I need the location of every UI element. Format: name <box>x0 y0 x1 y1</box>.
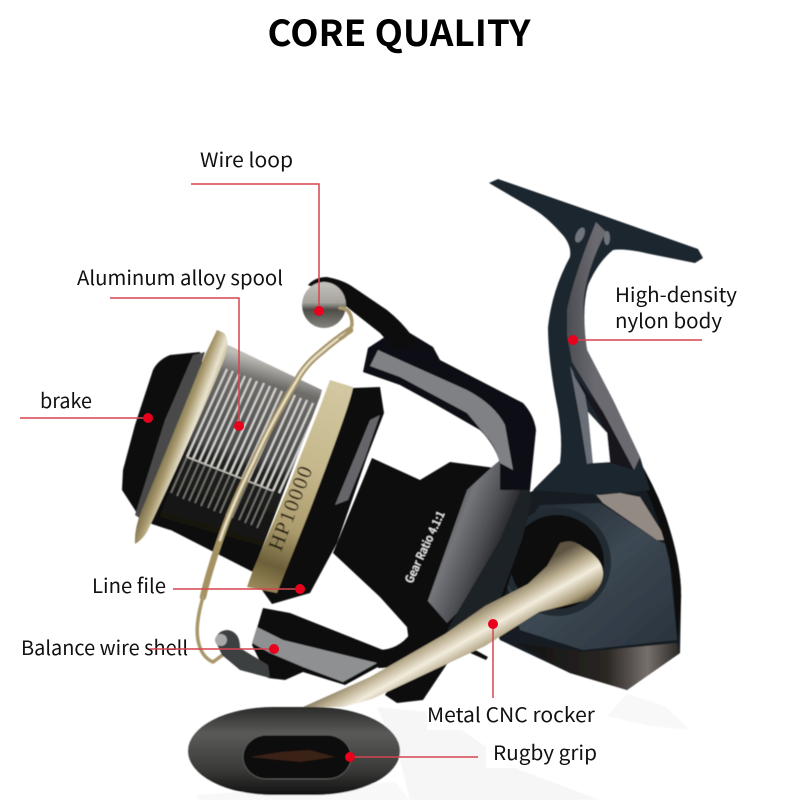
right edge stripe <box>637 457 681 640</box>
black ring <box>262 387 384 604</box>
callout: high-density nylon body: High-density <box>615 279 738 308</box>
copper facet <box>590 487 667 540</box>
title: CORE QUALITY <box>268 5 532 57</box>
gold spool band <box>247 380 384 604</box>
lower base facet <box>517 643 680 690</box>
central drive and rotor <box>333 450 532 703</box>
callout: wire loop: Wire loop <box>200 144 293 173</box>
crank well <box>503 508 611 616</box>
ratio panel <box>397 477 467 603</box>
leg grey panel <box>567 222 640 470</box>
flange <box>135 330 228 544</box>
callout: wire loop <box>191 144 324 316</box>
callout: metal CNC rocker <box>427 619 595 728</box>
fishing reel illustration <box>122 179 703 800</box>
callout: line file <box>92 570 305 599</box>
grey rotor band <box>427 450 530 623</box>
spool divider <box>187 457 273 491</box>
lower arm <box>215 608 425 685</box>
leg and foot <box>489 179 703 495</box>
upper rotor arm <box>363 327 536 490</box>
callout: high-density nylon body: nylon body <box>615 305 723 334</box>
model text: HP10000 <box>263 461 318 554</box>
brake cap <box>122 352 210 530</box>
callout: balance wire shell: Balance wire shell <box>21 632 188 661</box>
metal ring next to brake <box>135 352 205 525</box>
bail arm with roller <box>302 277 418 350</box>
callout: brake <box>20 385 153 423</box>
callout: brake: brake <box>40 385 92 414</box>
callout: high-density nylon body <box>568 279 738 345</box>
lower dark ribs <box>171 457 273 528</box>
callout: rugby grip <box>345 737 597 766</box>
reel body <box>468 457 681 690</box>
wire bail <box>197 308 352 662</box>
reflection beneath reel <box>195 694 690 800</box>
callout: rugby grip: Rugby grip <box>493 737 597 766</box>
callout: balance wire shell <box>21 632 279 661</box>
gear ratio text: Gear Ratio 4.1:1 <box>401 508 449 586</box>
callout: aluminum alloy spool: Aluminum alloy spool <box>77 262 283 291</box>
label backgrounds <box>427 705 601 768</box>
spool <box>135 330 322 572</box>
rugby grip <box>188 707 400 795</box>
callout: aluminum alloy spool <box>77 262 283 431</box>
callout: metal CNC rocker: Metal CNC rocker <box>427 699 595 728</box>
callout: line file: Line file <box>92 570 166 599</box>
handle arm <box>303 541 603 707</box>
upper silver ribs <box>187 369 319 493</box>
leg window <box>588 412 610 463</box>
screw <box>468 647 488 660</box>
